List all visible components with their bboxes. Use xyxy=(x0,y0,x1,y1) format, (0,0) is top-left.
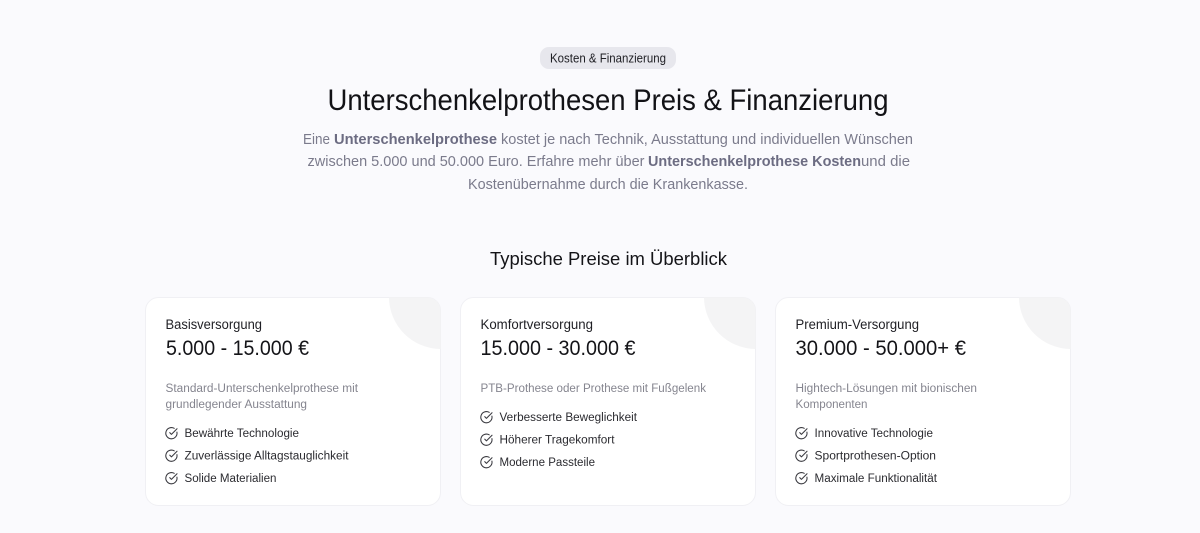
icon: check xyxy=(481,434,492,445)
intro paragraph: Unterschenkelprothese xyxy=(334,131,497,148)
badge: Kosten & Finanzierung xyxy=(540,47,676,69)
panel: Basisversorgung: Zuverlässige Alltagstauglichkeit xyxy=(184,450,349,462)
intro paragraph: kostet je nach Technik, Ausstattung und individuellen Wünschen xyxy=(501,131,913,148)
icon: check xyxy=(481,412,492,423)
panel: Komfortversorgung xyxy=(460,297,756,506)
icon: check xyxy=(166,428,177,439)
panel: Premium-Versorgung: Premium-Versorgung xyxy=(796,317,919,332)
panel: Komfortversorgung: PTB-Prothese oder Prothese mit Fußgelenk xyxy=(480,383,706,395)
icon: check xyxy=(796,450,807,461)
icon: check xyxy=(481,457,492,468)
icon: check xyxy=(166,473,177,484)
panel: Basisversorgung: 5.000 - 15.000 € xyxy=(166,337,309,360)
intro paragraph xyxy=(303,131,913,193)
icon: check xyxy=(796,428,807,439)
title: Unterschenkelprothesen Preis & Finanzierung xyxy=(328,84,888,117)
panel: Komfortversorgung: 15.000 - 30.000 € xyxy=(480,337,636,360)
panel: Premium-Versorgung: Komponenten xyxy=(796,399,868,411)
panel: Premium-Versorgung: Hightech-Lösungen mit bionischen xyxy=(796,383,977,395)
panel: Komfortversorgung: Komfortversorgung xyxy=(480,317,593,332)
panel: Premium-Versorgung xyxy=(775,297,1071,506)
badge: Kosten & Finanzierung: Kosten & Finanzierung xyxy=(550,52,666,66)
panel: Premium-Versorgung: Maximale Funktionalität xyxy=(814,473,938,485)
panel: Premium-Versorgung: Innovative Technologie xyxy=(814,428,933,440)
intro paragraph: Kostenübernahme durch die Krankenkasse. xyxy=(468,176,748,193)
icon: check xyxy=(166,450,177,461)
panel: Basisversorgung: Basisversorgung xyxy=(166,317,262,332)
panel: Basisversorgung: Solide Materialien xyxy=(184,473,276,485)
panel: Basisversorgung: Standard-Unterschenkelprothese mit xyxy=(166,383,359,395)
panel: Komfortversorgung: Verbesserte Beweglichkeit xyxy=(500,412,638,424)
intro paragraph: Eine xyxy=(303,131,330,148)
panel: Basisversorgung: Bewährte Technologie xyxy=(184,428,299,440)
section heading: Typische Preise im Überblick xyxy=(490,248,728,269)
icon: check xyxy=(796,473,807,484)
panel: Komfortversorgung: Moderne Passteile xyxy=(500,457,595,469)
panel: Basisversorgung xyxy=(145,297,441,506)
intro paragraph: und die xyxy=(861,153,910,170)
panel: Komfortversorgung: Höherer Tragekomfort xyxy=(500,434,615,446)
intro paragraph: Unterschenkelprothese Kosten xyxy=(648,153,861,170)
panel: Premium-Versorgung: 30.000 - 50.000+ € xyxy=(796,337,966,360)
intro paragraph: zwischen 5.000 und 50.000 Euro. Erfahre mehr über xyxy=(308,153,645,170)
panel: Basisversorgung: grundlegender Ausstattung xyxy=(166,399,307,411)
panel: Premium-Versorgung: Sportprothesen-Option xyxy=(814,450,936,462)
